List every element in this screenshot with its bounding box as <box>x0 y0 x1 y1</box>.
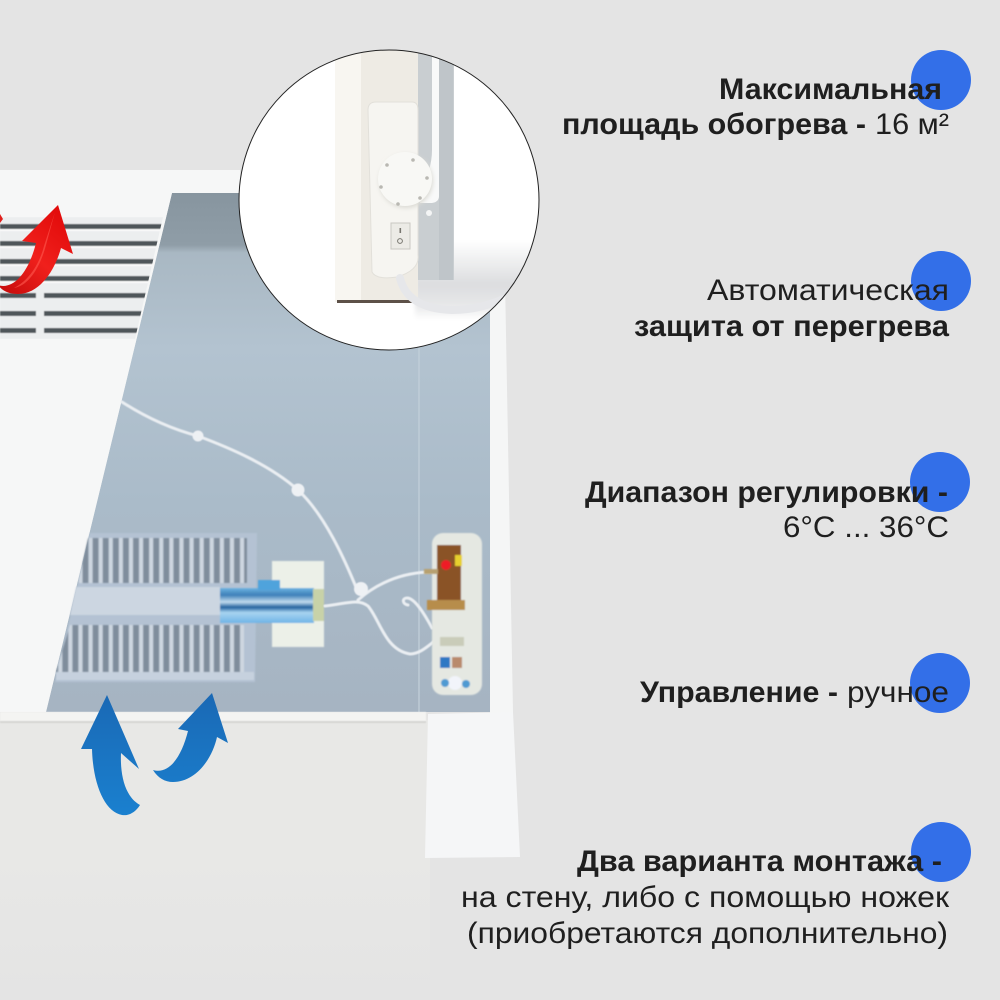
middle band <box>70 587 220 615</box>
heater foot <box>425 712 520 858</box>
overheat protection text: Автоматическая <box>707 274 949 307</box>
red arrow: warm air out <box>0 205 73 294</box>
brown relay <box>437 545 461 600</box>
tube end <box>313 589 324 621</box>
heating element <box>55 533 324 682</box>
thermostat housing <box>432 533 482 695</box>
power switch <box>391 223 410 249</box>
mounting options text: Два варианта монтажа - <box>577 845 942 878</box>
heating element base plate <box>55 533 257 682</box>
inset white disc <box>239 50 539 350</box>
lower heater body <box>0 720 430 1000</box>
wiring <box>122 402 436 654</box>
blue marker <box>911 822 971 882</box>
floor shadow <box>414 250 530 315</box>
heating area text: Максимальная <box>719 73 942 106</box>
blue marker <box>911 50 971 110</box>
feature: heating area: площадь обогрева - <box>562 108 866 141</box>
upper fins <box>78 538 247 583</box>
power cable <box>400 278 506 310</box>
feature: mounting options: (приобретаются дополнительно) <box>467 917 948 950</box>
lower fin edge <box>56 672 254 680</box>
mounting bracket <box>272 561 324 647</box>
wire clips <box>192 430 368 596</box>
heater feet <box>337 300 415 303</box>
feature: heating area: 16 м² <box>875 108 949 141</box>
yellow part <box>455 555 462 566</box>
metal bracket <box>418 50 454 280</box>
thermostat knob <box>378 152 433 208</box>
blue marker <box>910 653 970 713</box>
inset outline <box>239 50 539 350</box>
ventilation louvres <box>0 217 170 339</box>
right side frame <box>490 280 513 716</box>
blue tube <box>220 588 314 623</box>
bracket slot <box>420 50 439 203</box>
feature: adjustment range: 6°C ... 36°C <box>783 511 949 544</box>
control box <box>368 102 418 278</box>
blue marker <box>910 452 970 512</box>
terminals <box>440 637 464 646</box>
feature: heating area <box>562 50 971 141</box>
feature: overheat protection <box>634 251 971 343</box>
red indicator <box>441 560 451 570</box>
bracket hole <box>426 210 432 216</box>
inset photo: thermostat control <box>239 50 545 350</box>
lower fins <box>56 625 244 672</box>
feature: mounting options: на стену, либо с помощью ножек <box>461 881 950 914</box>
adjustment range text: Диапазон регулировки - <box>585 476 948 509</box>
tube clamp <box>258 580 280 590</box>
feature: control type: ручное <box>847 676 949 709</box>
blue arrow: cool air in, left <box>81 695 140 815</box>
heater front cover <box>0 170 240 712</box>
bracket highlight <box>439 50 453 280</box>
feature: adjustment range <box>585 452 970 544</box>
heater illustration <box>0 170 520 858</box>
bottom frame strip <box>0 712 426 723</box>
feature: mounting options <box>461 822 971 950</box>
heater column <box>335 50 361 302</box>
blue marker <box>911 251 971 311</box>
feature: control type <box>640 653 970 713</box>
glass edge line <box>418 340 420 712</box>
blue arrow: cool air in, right <box>153 693 228 782</box>
feature: overheat protection: защита от перегрева <box>634 310 949 343</box>
inner blue panel <box>46 193 490 712</box>
control type text: Управление - <box>640 676 838 709</box>
thermostat unit <box>424 533 482 695</box>
